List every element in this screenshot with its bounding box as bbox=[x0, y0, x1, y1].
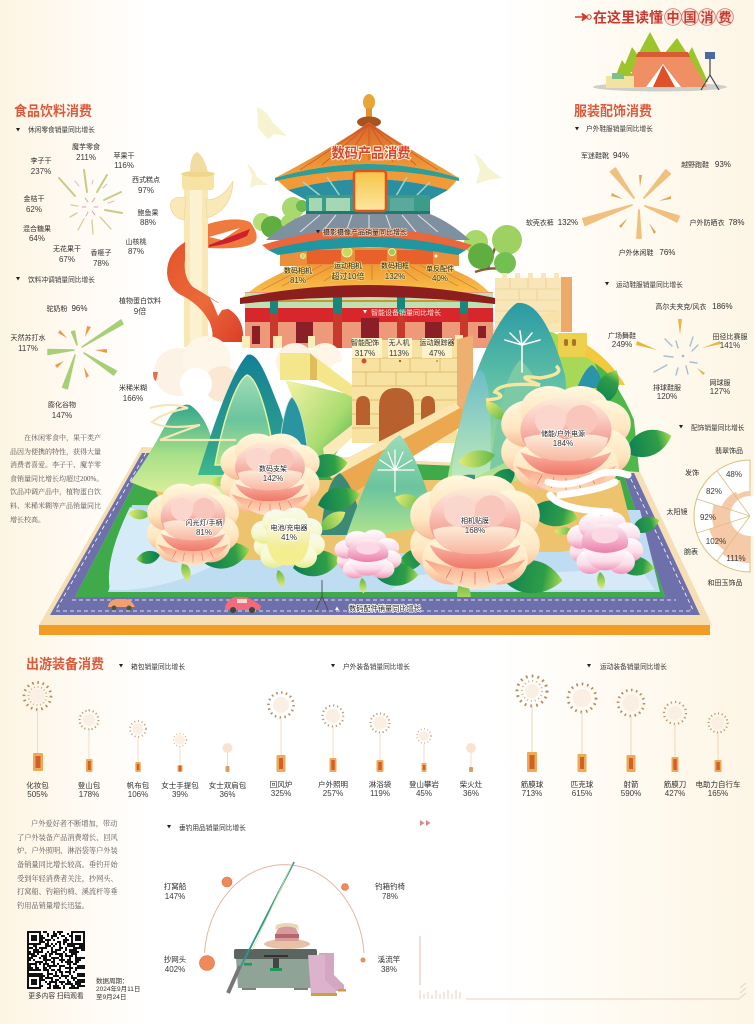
firework: canvas bag: 106% bbox=[128, 790, 148, 799]
chart: fishing arc: 钓箱钓椅 bbox=[375, 881, 405, 891]
snack labels: 62% bbox=[26, 205, 42, 214]
text: food commentary: 食销量同比增长均超过200%。 bbox=[10, 474, 103, 483]
sports apparel labels bbox=[608, 302, 748, 401]
firework: fascia knife: 筋膜刀 bbox=[664, 779, 686, 789]
firework: archery bbox=[618, 690, 644, 798]
roof data: 132% bbox=[385, 272, 405, 281]
firework: climbing: 登山攀岩 bbox=[409, 779, 439, 789]
data period: 2024年9月11日 bbox=[96, 984, 140, 993]
snack labels: 魔芋零食 bbox=[72, 142, 100, 151]
text: outing commentary bbox=[17, 819, 118, 910]
text: food commentary: 料、米稀米糊等产品销量同比 bbox=[10, 501, 101, 510]
firework: archery: 射箭 bbox=[624, 779, 639, 789]
legend: sport gear bbox=[587, 662, 667, 671]
firework: wind stove: 325% bbox=[271, 789, 291, 798]
legend: bags bbox=[119, 662, 185, 671]
firework: backpack: 36% bbox=[219, 790, 236, 799]
firework: fascia ball: 筋膜球 bbox=[521, 779, 544, 789]
snack labels: 64% bbox=[29, 234, 45, 243]
peony: digital stand: 142% bbox=[263, 474, 283, 483]
firework: climbing: 45% bbox=[416, 789, 432, 798]
clouds behind hills bbox=[153, 336, 350, 402]
text: outing commentary: 受到年轻消费者关注，抄网头、 bbox=[17, 874, 118, 884]
drinks labels: 147% bbox=[52, 411, 72, 420]
firework: handbag bbox=[161, 734, 199, 799]
sports apparel labels: 高尔夫夹克/风衣 186% bbox=[655, 302, 733, 311]
snack labels: 金桔干 bbox=[24, 194, 44, 203]
ribbon: lower swoosh bbox=[167, 242, 243, 342]
firework: e-bike: 电助力自行车 bbox=[696, 779, 741, 789]
tower data: 113% bbox=[389, 349, 409, 358]
snack labels: 97% bbox=[138, 186, 154, 195]
outdoor apparel labels bbox=[526, 151, 744, 257]
icon: tripod on road bbox=[316, 580, 328, 610]
label: smart devices: 智能设备销量同比增长 bbox=[371, 308, 441, 317]
chart: fishing arc: 78% bbox=[382, 892, 398, 901]
legend: sports apparel: 运动鞋服销量同比增长 bbox=[616, 280, 683, 289]
text: outing commentary: 打窝船、钓箱钓椅、溪流杆等垂 bbox=[17, 887, 118, 896]
firework: pickleball: 匹克球 bbox=[571, 779, 594, 789]
header title: 在这里读懂 bbox=[593, 10, 663, 26]
outdoor apparel labels: 户外防晒衣 78% bbox=[690, 218, 744, 227]
heading: food and drink: 食品饮料消费 bbox=[14, 103, 92, 119]
snack labels: 鲍鱼果 bbox=[138, 208, 158, 217]
text: food commentary bbox=[10, 433, 103, 524]
watchtower bbox=[352, 335, 473, 443]
text: outing commentary: 户外爱好者不断增加，带动 bbox=[31, 819, 117, 829]
icon: white firework right mountain bbox=[505, 331, 540, 372]
roof data: 40% bbox=[432, 274, 448, 283]
heading: digital products: 数码产品消费 bbox=[332, 145, 410, 161]
ribbon: upper band bbox=[208, 219, 257, 248]
data period: 至9月24日 bbox=[96, 993, 126, 1001]
chart: fishing arc: 147% bbox=[165, 892, 185, 901]
drinks labels: 植物蛋白饮料 bbox=[119, 296, 161, 305]
swirl clouds in mountains bbox=[486, 366, 559, 400]
peony: pink centre bbox=[334, 530, 402, 578]
cloud right swirl bbox=[548, 472, 628, 512]
outdoor apparel labels: 军迷鞋靴 94% bbox=[581, 151, 629, 160]
firework: cosmetic bag bbox=[24, 682, 51, 799]
firework: handbag: 39% bbox=[172, 790, 188, 799]
chart: accessories radial: 111% bbox=[726, 554, 746, 563]
peony: camera film bbox=[410, 475, 540, 589]
wall crenels bbox=[242, 335, 463, 348]
text: food commentary: 消费者喜爱。李子干、魔芋零 bbox=[10, 460, 101, 469]
heading: apparel: 服装配饰消费 bbox=[574, 103, 652, 119]
qr caption: 更多内容 扫码观看 bbox=[28, 991, 84, 1000]
roof data: 超过10倍 bbox=[332, 271, 364, 281]
icon: boots bbox=[308, 953, 346, 996]
trees left bbox=[253, 197, 308, 238]
peony: camera film: 168% bbox=[465, 526, 485, 535]
label: photography: 摄影摄像产品销量同比增长 bbox=[323, 228, 407, 236]
outdoor apparel labels: 户外休闲鞋 76% bbox=[619, 248, 675, 257]
icon: fishing rod bbox=[228, 862, 294, 993]
roof data: 运动相机 bbox=[334, 261, 362, 270]
green slope left of tower bbox=[285, 380, 352, 470]
tower data: 317% bbox=[355, 349, 375, 358]
swirl clouds left bbox=[150, 405, 236, 440]
chart: fishing arc: 打窝船 bbox=[164, 881, 187, 891]
snack labels: 88% bbox=[140, 218, 156, 227]
temple bbox=[39, 94, 712, 635]
snack labels: 山核桃 bbox=[126, 237, 146, 246]
drinks labels: 9倍 bbox=[134, 306, 146, 316]
snack labels: 67% bbox=[59, 255, 75, 264]
sports apparel labels: 排球鞋服 bbox=[653, 383, 681, 392]
drinks labels: 117% bbox=[18, 344, 38, 353]
snack labels: 香榧子 bbox=[90, 248, 112, 257]
legend: accessories: 配饰销量同比增长 bbox=[691, 423, 745, 432]
sports apparel labels: 120% bbox=[657, 392, 677, 401]
sports apparel labels: 127% bbox=[710, 387, 730, 396]
tower data: 智能配饰 bbox=[351, 338, 379, 347]
text: outing commentary: 备销量同比增长较高。垂钓开始 bbox=[17, 860, 118, 869]
sports apparel labels: 广场舞鞋 bbox=[608, 331, 636, 340]
icon: white dove bbox=[210, 298, 232, 316]
peony: energy storage: 储能/户外电源 bbox=[541, 429, 585, 438]
sports apparel labels: 田径比赛服 bbox=[712, 332, 748, 341]
board platform bbox=[39, 447, 712, 635]
drinks labels: 166% bbox=[123, 394, 143, 403]
chart: accessories radial bbox=[666, 446, 754, 587]
firework: firewood stove bbox=[460, 743, 483, 798]
chart: fishing arc: 402% bbox=[165, 965, 185, 974]
sports apparel labels: 141% bbox=[720, 341, 740, 350]
text: outing commentary: 炉、户外照明、淋浴袋等户外装 bbox=[17, 846, 118, 855]
peony: batteries chargers bbox=[251, 508, 325, 568]
firework: pickleball: 615% bbox=[572, 789, 592, 798]
drinks labels bbox=[10, 296, 161, 420]
snack labels: 211% bbox=[76, 153, 96, 162]
firework: hiking pack: 登山包 bbox=[78, 780, 101, 790]
firework: fascia knife: 427% bbox=[665, 789, 685, 798]
firework: hiking pack: 178% bbox=[79, 790, 99, 799]
header title bbox=[575, 9, 733, 26]
drinks labels: 米稀米糊 bbox=[119, 383, 147, 392]
yellow wall section bbox=[280, 353, 352, 397]
text: outing commentary: 钓用品销量增长迅猛。 bbox=[17, 901, 89, 910]
peony: batteries chargers: 电池/充电器 bbox=[271, 523, 307, 532]
plaque bbox=[354, 171, 386, 211]
snack labels: 237% bbox=[31, 167, 51, 176]
monument: huabiao column bbox=[170, 152, 233, 347]
peony: energy storage bbox=[501, 386, 631, 494]
header title: 中 bbox=[666, 10, 680, 25]
legend: sport gear: 运动装备销量同比增长 bbox=[600, 662, 667, 671]
firework: outdoor lighting bbox=[318, 706, 348, 798]
tower data bbox=[351, 338, 454, 358]
tower data: 无人机 bbox=[388, 338, 410, 347]
top roof bbox=[275, 122, 459, 215]
roof data bbox=[284, 261, 454, 285]
roof data: 81% bbox=[290, 276, 306, 285]
finial bbox=[357, 94, 381, 128]
leaves and peonies bbox=[127, 366, 675, 611]
snack labels: 混合糖果 bbox=[23, 224, 51, 233]
trees right bbox=[464, 225, 522, 274]
snack labels: 李子干 bbox=[30, 156, 52, 165]
peony: camera film: 相机贴膜 bbox=[461, 516, 489, 525]
chart: fishing arc: 38% bbox=[381, 965, 397, 974]
legend: outdoor gear bbox=[331, 662, 410, 671]
text: outing commentary: 了户外装备产品消费增长、回风 bbox=[17, 833, 118, 842]
text: food commentary: 饮品冲调产品中，植物蛋白饮 bbox=[10, 487, 101, 497]
snack labels: 87% bbox=[128, 247, 144, 256]
peony: batteries chargers: 41% bbox=[281, 533, 297, 542]
chart: fishing arc: 抄网头 bbox=[164, 954, 187, 964]
peony: flashlight handle bbox=[147, 483, 239, 566]
legend: snack growth: 休闲零食销量同比增长 bbox=[28, 125, 95, 134]
legend: sports apparel bbox=[605, 280, 683, 289]
label: digital accessories: 数码配件销量同比增长 bbox=[349, 604, 421, 613]
chart: accessories radial: 腕表 bbox=[684, 547, 698, 556]
chart: firecrackers bbox=[24, 676, 741, 799]
decoration: frame bbox=[420, 936, 746, 999]
header title: 消 bbox=[700, 10, 714, 25]
firework: outdoor lighting: 257% bbox=[323, 789, 343, 798]
snack labels: 西式糕点 bbox=[132, 175, 160, 184]
firework: wind stove bbox=[268, 692, 294, 798]
firework: fascia ball: 713% bbox=[522, 789, 542, 798]
chart: accessories radial: 102% bbox=[706, 537, 726, 546]
chart: outdoor apparel fireworks bbox=[583, 168, 679, 238]
data period bbox=[96, 976, 140, 1001]
outdoor apparel labels: 越野跑鞋 93% bbox=[681, 160, 731, 169]
mountains left bbox=[130, 354, 310, 505]
snack labels: 苹果干 bbox=[114, 151, 134, 160]
chart: sports apparel fireworks bbox=[636, 319, 721, 375]
firework: shower bag: 淋浴袋 bbox=[369, 779, 392, 789]
peony: flashlight handle: 闪光灯/手柄 bbox=[186, 518, 222, 527]
chart: snack fireworks bbox=[59, 170, 122, 234]
peony: flashlight handle: 81% bbox=[196, 528, 212, 537]
chart: accessories radial: 发饰 bbox=[685, 468, 699, 477]
legend: outdoor apparel bbox=[575, 124, 653, 133]
firework: pickleball bbox=[568, 684, 596, 798]
firework: fascia ball bbox=[517, 676, 547, 798]
drinks labels: 驼奶粉 96% bbox=[47, 304, 87, 313]
firework: shower bag bbox=[369, 714, 392, 798]
legend: fishing: 垂钓用品销量同比增长 bbox=[179, 823, 246, 832]
icon: pink car bbox=[225, 597, 261, 613]
legend: outdoor apparel: 户外鞋服销量同比增长 bbox=[586, 124, 653, 133]
chart: fishing arc bbox=[164, 865, 405, 974]
firework: firewood stove: 柴火灶 bbox=[460, 779, 483, 789]
great wall right bbox=[455, 273, 640, 480]
second roof bbox=[262, 214, 472, 266]
firework: e-bike bbox=[696, 714, 741, 798]
chart: accessories radial: 和田玉饰品 bbox=[708, 578, 742, 587]
firework: backpack bbox=[209, 743, 247, 799]
text: food commentary: 在休闲零食中，果干类产 bbox=[24, 433, 101, 443]
legend: drinks growth bbox=[16, 275, 95, 284]
chart: fishing arc: 溪流竿 bbox=[378, 954, 401, 964]
legend: accessories bbox=[679, 423, 745, 432]
roof data: 数码相机 bbox=[284, 266, 312, 275]
snack labels: 无花果干 bbox=[53, 244, 81, 253]
peony: energy storage: 184% bbox=[553, 439, 573, 448]
icon: orange car bbox=[108, 599, 135, 610]
icon: white firework on mountain bbox=[378, 450, 414, 492]
legend: fishing bbox=[167, 823, 246, 832]
snack labels: 116% bbox=[114, 161, 134, 170]
drinks labels: 天然苏打水 bbox=[10, 333, 46, 342]
firework: fascia knife bbox=[664, 702, 686, 798]
leaves behind peonies bbox=[127, 366, 675, 611]
data period: 数据周期： bbox=[96, 976, 128, 985]
legend: bags: 箱包销量同比增长 bbox=[131, 662, 185, 671]
chart: accessories radial: 92% bbox=[700, 513, 716, 522]
road bottom overlay bbox=[50, 597, 700, 615]
firework: archery: 590% bbox=[621, 789, 641, 798]
sports apparel labels: 249% bbox=[612, 340, 632, 349]
icon: tackle box bbox=[234, 949, 317, 990]
firework: shower bag: 119% bbox=[370, 789, 390, 798]
chart: drinks fireworks bbox=[48, 320, 123, 389]
firework: cosmetic bag: 505% bbox=[27, 790, 48, 799]
sports apparel labels: 网球服 bbox=[710, 378, 730, 387]
tower data: 47% bbox=[429, 349, 445, 358]
icon: hat bbox=[264, 923, 310, 949]
third roof bbox=[240, 265, 495, 348]
roof data: 数码相框 bbox=[381, 261, 409, 270]
header title: 费 bbox=[718, 10, 732, 25]
firework: cosmetic bag: 化妆包 bbox=[26, 780, 49, 790]
chart: accessories radial: 翡翠饰品 bbox=[715, 446, 743, 455]
tower data: 运动跟踪器 bbox=[420, 338, 454, 347]
firework: canvas bag: 帆布包 bbox=[127, 780, 150, 790]
firework: firewood stove: 36% bbox=[463, 789, 479, 798]
peony: digital stand bbox=[220, 433, 320, 516]
golden walkway bbox=[323, 402, 472, 498]
heading: outing equipment: 出游装备消费 bbox=[26, 656, 104, 672]
firework: wind stove: 回风炉 bbox=[270, 779, 292, 789]
mountains center and right bbox=[321, 303, 603, 540]
text: food commentary: 增长校高。 bbox=[10, 515, 45, 524]
legend: outdoor gear: 户外装备销量同比增长 bbox=[343, 662, 410, 671]
firework: handbag: 女士手提包 bbox=[161, 780, 199, 790]
legend: snack growth bbox=[16, 125, 95, 134]
chart: accessories radial: 48% bbox=[726, 470, 742, 479]
header title: 国 bbox=[683, 10, 697, 25]
qr code bbox=[27, 931, 85, 989]
firework: hiking pack bbox=[78, 710, 101, 799]
peony: digital stand: 数码支架 bbox=[259, 464, 287, 473]
firework: backpack: 女士双肩包 bbox=[209, 780, 247, 790]
legend: drinks growth: 饮料冲调销量同比增长 bbox=[28, 275, 95, 284]
text: food commentary: 品因为便携的特性，获得大量 bbox=[10, 447, 101, 457]
firework: canvas bag bbox=[127, 721, 150, 799]
icon: camping tent bbox=[593, 32, 727, 92]
decoration: arrows bbox=[420, 820, 430, 826]
chart: accessories radial: 太阳镜 bbox=[666, 507, 688, 516]
firework: outdoor lighting: 户外照明 bbox=[318, 779, 348, 789]
drinks labels: 膨化谷物 bbox=[48, 400, 76, 409]
outdoor apparel labels: 软壳衣裤 132% bbox=[526, 218, 578, 227]
roof data: 单反配件 bbox=[426, 264, 454, 273]
snack labels: 78% bbox=[93, 259, 109, 268]
label: smart devices bbox=[363, 308, 441, 317]
peony: pink right bbox=[567, 512, 643, 574]
chart: accessories radial: 82% bbox=[706, 487, 722, 496]
icon: doves bbox=[247, 107, 502, 188]
firework: climbing bbox=[409, 729, 439, 798]
snack labels bbox=[23, 142, 160, 268]
firework: e-bike: 165% bbox=[708, 789, 728, 798]
